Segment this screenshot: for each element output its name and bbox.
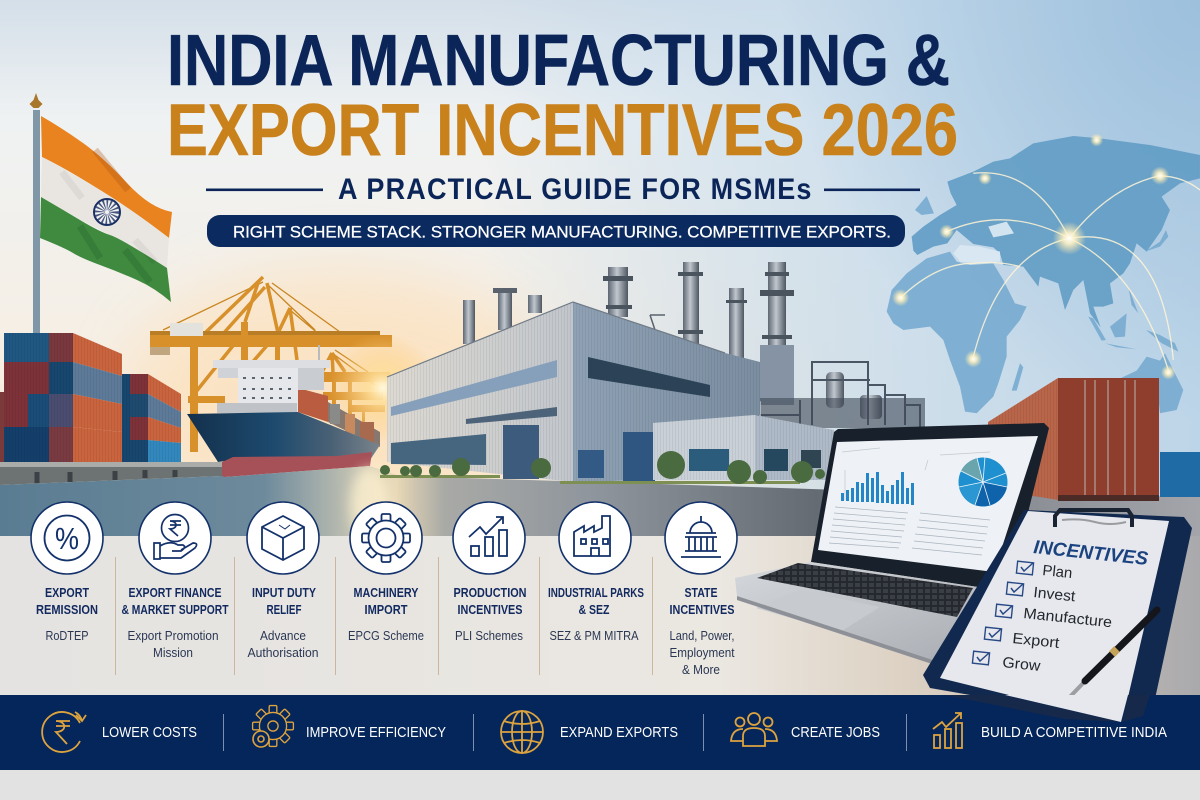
item: export (984, 627, 1061, 652)
cargo ship (187, 345, 380, 477)
scheme: input duty relief: Authorisation (248, 646, 319, 660)
screen (818, 436, 1038, 572)
paper (940, 511, 1169, 723)
scheme: input duty relief: RELIEF (266, 602, 302, 617)
side door (623, 432, 655, 481)
superstructure (213, 345, 330, 413)
scheme: state incentives: STATE (684, 585, 718, 600)
scheme: state incentives: & More (682, 663, 720, 677)
checklist (972, 561, 1113, 675)
route nodes (892, 133, 1176, 380)
scheme: machinery import: MACHINERY (354, 585, 419, 600)
stack two (122, 374, 181, 462)
continents (887, 136, 1200, 413)
pie chart (958, 457, 1008, 506)
side wall (573, 302, 760, 482)
scheme: production incentives: INCENTIVES (458, 602, 523, 617)
incentives heading: INCENTIVES (1032, 537, 1149, 570)
benefit: expand exports: EXPAND EXPORTS (560, 725, 678, 741)
item: plan: Plan (1042, 562, 1073, 582)
keyboard (757, 563, 973, 617)
sun glow (328, 333, 438, 443)
scheme: export remission: % (55, 521, 79, 556)
scheme: industrial parks: INDUSTRIAL PARKS (548, 585, 644, 600)
loading door (503, 425, 539, 479)
benefit: improve efficiency (253, 706, 446, 747)
crane cluster (150, 277, 392, 452)
benefit: build a competitive india: BUILD A COMPETITIVE INDIA (981, 725, 1167, 741)
Indian flag (30, 93, 172, 335)
deck containers (298, 388, 380, 447)
refinery pipes (700, 345, 925, 428)
laptop (735, 423, 1049, 664)
ground water and pavement (0, 466, 1200, 543)
item: grow: Grow (1002, 654, 1041, 675)
scheme: input duty relief (247, 502, 319, 660)
factory shrubs (380, 451, 825, 484)
scheme: input duty relief: INPUT DUTY (252, 585, 316, 600)
scheme: industrial parks (548, 502, 644, 643)
scheme: machinery import (348, 502, 424, 643)
board (923, 510, 1192, 724)
red waterline (215, 452, 372, 477)
crane cables (163, 282, 375, 385)
benefit: lower costs (42, 712, 197, 752)
benefit: build a competitive india (933, 713, 1167, 748)
data tables (829, 448, 990, 555)
benefit: create jobs: CREATE JOBS (791, 725, 880, 741)
clipboard lower corner (945, 695, 1150, 722)
lower windows (391, 434, 486, 465)
scheme: export remission: REMISSION (36, 602, 98, 617)
tagline pill (207, 215, 905, 247)
column dividers (116, 557, 652, 675)
right side red container (988, 378, 1159, 501)
factory stacks (463, 262, 794, 404)
bar chart (841, 472, 914, 505)
hull (187, 412, 380, 462)
item: plan (1016, 561, 1073, 582)
scheme: export finance (122, 502, 229, 660)
scheme: industrial parks: SEZ & PM MITRA (550, 629, 639, 643)
scheme: machinery import: EPCG Scheme (348, 629, 424, 643)
factory building (387, 302, 834, 482)
bottom benefits bar (0, 695, 1200, 770)
ashoka chakra (94, 199, 120, 225)
item: invest (1006, 582, 1077, 605)
benefit: improve efficiency: IMPROVE EFFICIENCY (306, 725, 446, 741)
scheme: state incentives: INCENTIVES (670, 602, 735, 617)
item: manufacture (995, 604, 1113, 631)
title: EXPORT INCENTIVES 2026 (167, 90, 958, 171)
canopy (466, 407, 557, 424)
scheme: export remission (31, 502, 103, 643)
scheme: state incentives (665, 502, 737, 677)
scheme: production incentives: PRODUCTION (454, 585, 526, 600)
clipboard (923, 510, 1192, 724)
annex (653, 415, 834, 480)
scheme: export remission: RoDTEP (46, 629, 88, 643)
benefit: lower costs: LOWER COSTS (102, 725, 197, 741)
scheme: export finance: Export Promotion (128, 629, 219, 643)
scheme: export finance: EXPORT FINANCE (128, 585, 222, 600)
item: grow (972, 651, 1041, 675)
benefit: create jobs (731, 713, 880, 746)
route arcs (901, 173, 1200, 370)
clip (1055, 510, 1132, 527)
benefit: expand exports (501, 711, 678, 753)
scheme: state incentives: Employment (670, 646, 735, 660)
item: invest: Invest (1033, 584, 1077, 605)
subtitle: A PRACTICAL GUIDE FOR MSMEs (338, 173, 811, 206)
scheme: export finance: & MARKET SUPPORT (122, 602, 229, 617)
scheme: export remission: EXPORT (45, 585, 89, 600)
background sky (0, 0, 1200, 540)
scheme row (31, 502, 737, 677)
world map with trade routes (887, 133, 1200, 413)
bottom footer strip (0, 770, 1200, 800)
stack one (0, 333, 122, 462)
laptop base (735, 562, 998, 660)
left container stacks (0, 333, 181, 462)
scheme: state incentives: Land, Power, (670, 629, 734, 643)
item: export: Export (1012, 630, 1061, 652)
scheme: industrial parks: & SEZ (578, 602, 610, 617)
quay (0, 462, 222, 485)
scheme: input duty relief: Advance (260, 629, 306, 643)
right side blue container (1160, 452, 1200, 497)
scheme: production incentives: PLI Schemes (455, 629, 523, 643)
pen (1065, 610, 1157, 702)
lower band (0, 536, 1200, 696)
title (167, 21, 958, 171)
front wall (387, 302, 573, 482)
lid (811, 423, 1049, 590)
item: manufacture: Manufacture (1023, 605, 1113, 631)
trackpad (756, 590, 880, 632)
title: INDIA MANUFACTURING & (167, 21, 950, 101)
scheme: machinery import: IMPORT (364, 602, 408, 617)
scheme: export finance: Mission (153, 646, 193, 660)
scheme: production incentives (453, 502, 526, 643)
tagline pill: RIGHT SCHEME STACK. STRONGER MANUFACTURING. COMPETITIVE EXPORTS. (233, 222, 891, 242)
crane struts (195, 277, 345, 393)
upper windows (391, 360, 557, 416)
